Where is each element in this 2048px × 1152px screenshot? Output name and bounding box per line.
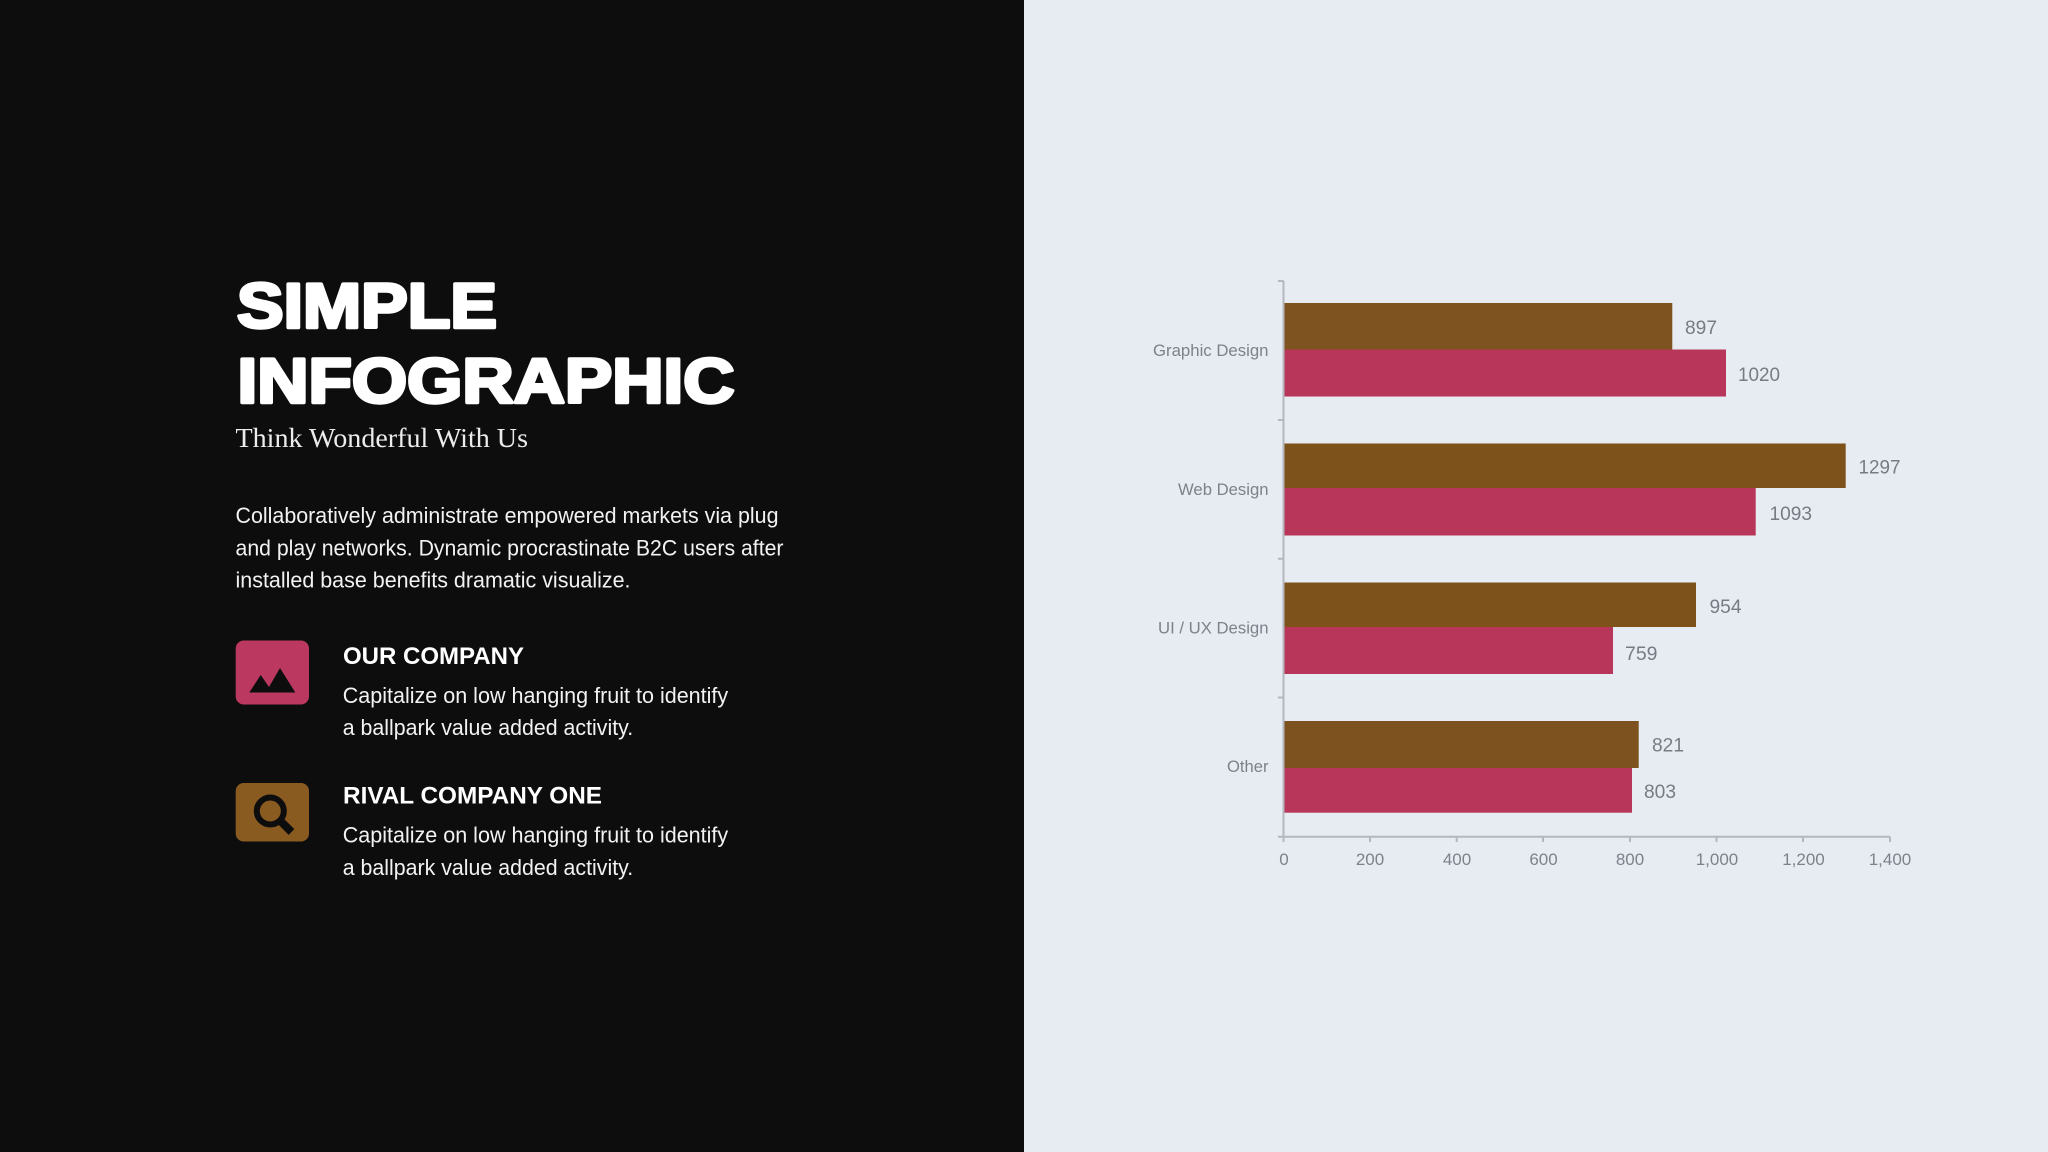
panel: rival company one <box>236 782 728 880</box>
intro paragraph <box>236 503 784 592</box>
heading: our company: OUR COMPANY <box>343 643 524 670</box>
group: graphic design <box>1153 303 1780 396</box>
panel: right background <box>1024 0 2048 1152</box>
group: graphic design: 1020 <box>1738 364 1780 386</box>
heading: rival company one: RIVAL COMPANY ONE <box>343 782 602 810</box>
intro paragraph: Collaboratively administrate empowered markets via plug <box>236 503 778 528</box>
description: rival company one: a ballpark value added activity. <box>343 855 633 880</box>
group: web design <box>1178 444 1900 536</box>
description: our company: a ballpark value added activity. <box>343 715 633 740</box>
group: other: Other <box>1227 757 1269 776</box>
intro paragraph: installed base benefits dramatic visualize. <box>236 568 630 592</box>
x axis labels: 1,200 <box>1782 850 1825 869</box>
group: ui / ux design: 759 <box>1625 643 1658 665</box>
x axis labels: 200 <box>1356 850 1384 869</box>
icon: mountain <box>236 640 309 704</box>
bar chart <box>1153 281 1911 869</box>
x axis labels: 1,000 <box>1696 850 1738 869</box>
x axis labels: 0 <box>1279 850 1289 869</box>
chart axes <box>1278 281 1890 842</box>
description: rival company one <box>343 822 728 880</box>
description: our company <box>343 683 728 740</box>
icon: magnifying glass <box>236 783 309 842</box>
group: other: 803 <box>1644 781 1676 803</box>
group: web design: Web Design <box>1178 480 1268 499</box>
x axis labels: 600 <box>1529 850 1558 869</box>
description: our company: Capitalize on low hanging fruit to identify <box>343 683 728 708</box>
intro paragraph: and play networks. Dynamic procrastinate B2C users after <box>236 536 784 560</box>
group: ui / ux design: UI / UX Design <box>1158 618 1268 638</box>
group: web design: 1297 <box>1858 456 1900 478</box>
group: other <box>1227 721 1684 813</box>
subtitle: Think Wonderful With Us <box>236 423 528 453</box>
title: SIMPLE <box>237 272 497 342</box>
group: ui / ux design <box>1158 582 1742 674</box>
title <box>237 272 734 416</box>
x axis labels: 800 <box>1616 850 1644 869</box>
panel: left dark background <box>0 0 1024 1152</box>
description: rival company one: Capitalize on low hanging fruit to identify <box>343 822 728 848</box>
x axis labels <box>1279 850 1911 869</box>
group: graphic design: Graphic Design <box>1153 341 1268 360</box>
group: ui / ux design: 954 <box>1710 596 1742 618</box>
title: INFOGRAPHIC <box>238 346 734 416</box>
group: other: 821 <box>1652 734 1684 756</box>
panel: our company <box>236 640 728 740</box>
group: graphic design: 897 <box>1685 317 1717 339</box>
x axis labels: 400 <box>1443 850 1471 869</box>
group: web design: 1093 <box>1770 503 1812 525</box>
x axis labels: 1,400 <box>1869 850 1911 869</box>
